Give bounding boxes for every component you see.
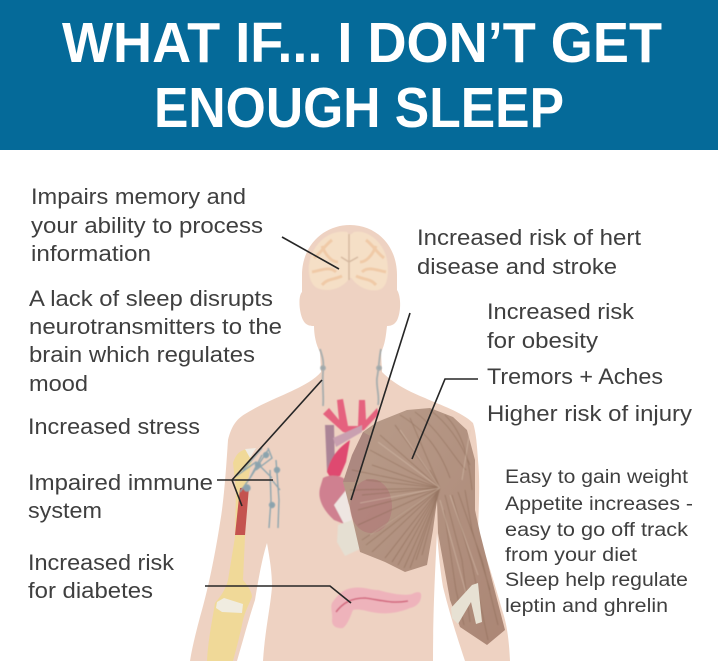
text: diabetes: for diabetes — [28, 578, 153, 603]
text: tremors: Tremors + Aches — [487, 364, 663, 389]
text: diabetes: Increased risk — [28, 550, 175, 575]
text: neurotransmitters — [29, 286, 282, 396]
text: weight and appetite: leptin and ghrelin — [505, 596, 668, 617]
text: weight and appetite — [505, 467, 693, 617]
text: obesity — [487, 299, 635, 353]
text: memory: information — [31, 241, 151, 266]
icon: neck lymph nodes — [320, 349, 381, 406]
text: diabetes — [28, 550, 175, 603]
text: weight and appetite: from your diet — [505, 545, 638, 566]
header banner — [0, 0, 718, 150]
text: obesity: Increased risk — [487, 299, 635, 324]
text: weight and appetite: Appetite increases - — [505, 494, 693, 515]
text: weight and appetite: easy to go off track — [505, 520, 689, 541]
muscle fibres — [350, 410, 498, 640]
translucent pericardium — [350, 479, 392, 533]
title — [62, 11, 662, 140]
body silhouette — [190, 225, 510, 661]
icon: heart — [319, 399, 379, 556]
icon: arm bone — [207, 448, 256, 661]
text: memory: Impairs memory and — [31, 184, 246, 209]
text: injury: Higher risk of injury — [487, 401, 692, 426]
text: memory: your ability to process — [31, 213, 263, 238]
icon: brain — [309, 232, 388, 290]
text: neurotransmitters: A lack of sleep disrupts — [29, 286, 273, 311]
icon: bone marrow — [235, 487, 249, 535]
icon: pancreas — [331, 587, 421, 628]
text: weight and appetite: Easy to gain weight — [505, 467, 689, 488]
text: stress: Increased stress — [28, 414, 200, 439]
pointer lines — [205, 237, 478, 603]
icon: chest and arm muscle — [343, 408, 505, 645]
icon: armpit lymph nodes — [236, 448, 280, 528]
text: immune system: system — [28, 498, 102, 523]
text: weight and appetite: Sleep help regulate — [505, 570, 688, 591]
text: heart disease: Increased risk of hert — [417, 225, 641, 250]
text: neurotransmitters: neurotransmitters to the — [29, 314, 282, 339]
text: neurotransmitters: brain which regulates — [29, 342, 255, 367]
text: immune system — [28, 470, 213, 523]
title: WHAT IF... I DON’T GET — [62, 11, 662, 75]
title: ENOUGH SLEEP — [154, 76, 564, 140]
text: obesity: for obesity — [487, 328, 598, 353]
text: heart disease — [417, 225, 641, 279]
text: heart disease: disease and stroke — [417, 254, 617, 279]
text: memory — [31, 184, 263, 266]
text: immune system: Impaired immune — [28, 470, 213, 495]
text: neurotransmitters: mood — [29, 371, 88, 396]
